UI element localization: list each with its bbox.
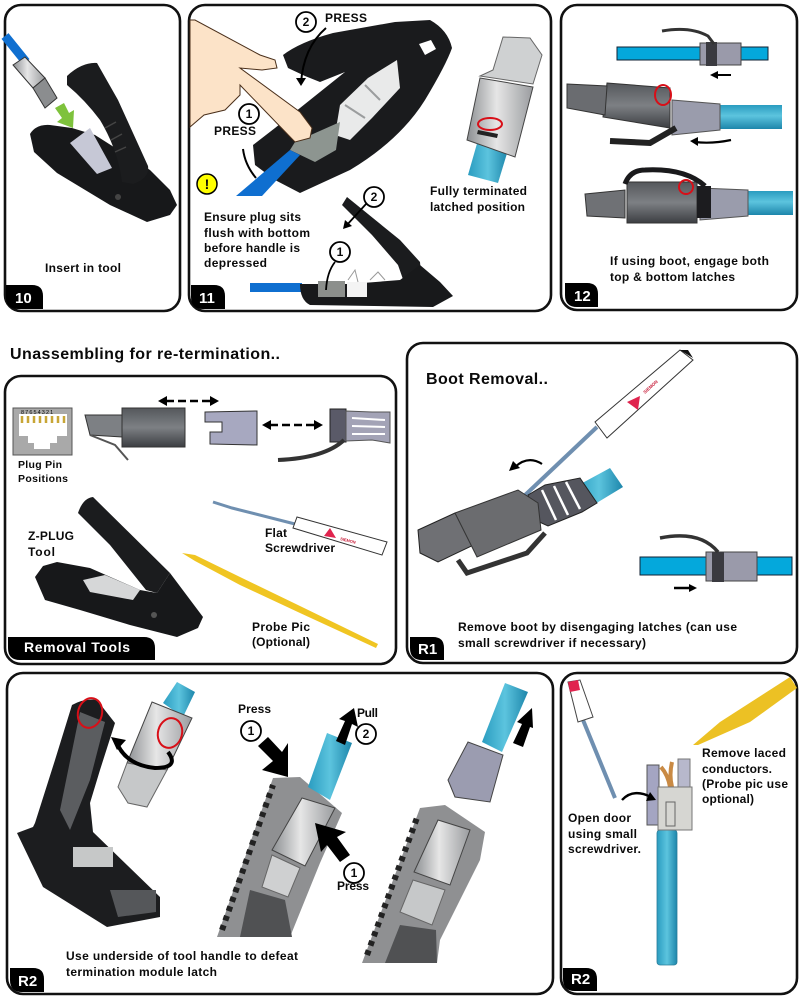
caption: If using boot, engage both (610, 254, 769, 268)
step label 12: 12 (574, 288, 591, 305)
caption: Use underside of tool handle to defeat (66, 949, 298, 963)
press and pull markers: 2 (363, 727, 370, 741)
caption: remove conductors: conductors. (702, 762, 772, 776)
note: before handle is (204, 241, 300, 255)
press 2 marker: 2 (303, 15, 310, 29)
caption: Insert in tool (45, 261, 121, 275)
step label R1 (410, 637, 444, 660)
label: Flat (265, 526, 287, 540)
panel: R2 door and conductors (561, 673, 797, 994)
icon: hand (190, 20, 312, 142)
icon: warning: ! (205, 176, 209, 192)
panel: step 10 (5, 5, 180, 311)
caption (458, 620, 737, 650)
caption: open door: screwdriver. (568, 842, 641, 856)
icon: curved arrow (509, 460, 542, 471)
press and pull markers: 1 (351, 866, 358, 880)
label (28, 529, 74, 559)
icon: curved arrow (622, 792, 656, 801)
icon: small screwdriver (568, 680, 615, 798)
press and pull markers: 1 (248, 724, 255, 738)
press and pull markers (238, 702, 378, 893)
press 2 marker: PRESS (325, 11, 367, 25)
icon: screwdriver in latch (522, 350, 693, 498)
step label 11: 11 (199, 290, 215, 307)
press and pull markers: Press (238, 702, 271, 716)
icon: plug pin diagram (13, 408, 72, 455)
step label R2: R2 (571, 971, 590, 988)
press 1 marker: 1 (246, 107, 253, 121)
caption: open door: using small (568, 827, 637, 841)
note: flush with bottom (204, 226, 310, 240)
caption: small screwdriver if necessary) (458, 636, 646, 650)
side markers: 2 (371, 190, 378, 204)
step label 12 (565, 283, 598, 307)
label: Probe Pic (252, 620, 310, 634)
label: Tool (28, 545, 55, 559)
caption: termination module latch (66, 965, 217, 979)
label: Z-PLUG (28, 529, 74, 543)
icon: red latch rings (75, 695, 185, 751)
label: (Optional) (252, 635, 310, 649)
press 1 marker (214, 104, 259, 178)
caption: top & bottom latches (610, 270, 735, 284)
caption: remove conductors (702, 746, 788, 806)
icon: Z-PLUG tool (35, 497, 203, 637)
note: Ensure plug sits (204, 210, 301, 224)
caption: open door: Open door (568, 811, 631, 825)
icon: boot on cable (640, 536, 792, 592)
tab label: Removal Tools (24, 639, 130, 655)
icon: plug housing (85, 408, 185, 460)
step label R2 (563, 968, 597, 991)
icon: open module on cable (647, 759, 692, 965)
arrow (262, 420, 323, 430)
icon: plug engaging bottom latch (567, 83, 782, 146)
icon: plug with latch (118, 682, 195, 807)
icon: plug pin diagram: 87654321 (21, 410, 54, 416)
icon: probe tip (693, 677, 797, 745)
label: Plug Pin (18, 459, 62, 471)
step label R1: R1 (418, 641, 437, 658)
label (265, 526, 335, 555)
label: Positions (18, 473, 68, 485)
label (252, 620, 310, 649)
caption: Fully terminated (430, 184, 527, 198)
caption: Remove boot by disengaging latches (can use (458, 620, 737, 634)
caption: open door (568, 811, 641, 856)
caption (430, 184, 527, 214)
panel: R2 tool latch (7, 673, 553, 994)
icon: plug with top latch engaged (585, 170, 793, 223)
icon: terminated plug (467, 37, 542, 183)
tab label (8, 637, 155, 660)
icon: plug seated in handle (217, 733, 352, 937)
icon: blue cable and plug (5, 36, 57, 108)
icon: probe pic (182, 553, 378, 648)
icon: Z-PLUG tool (30, 63, 177, 222)
press and pull markers: Press (337, 879, 369, 893)
step label R2 (10, 968, 44, 992)
icon: boot (278, 409, 390, 460)
icon: tool side view (250, 197, 453, 307)
arrow (158, 396, 219, 406)
icon: screwdriver in latch: SIEMON (642, 379, 659, 395)
side markers: 1 (337, 245, 344, 259)
step label 10: 10 (15, 290, 32, 307)
press 2 marker (296, 11, 367, 86)
icon: warning (197, 174, 217, 194)
press 1 marker: PRESS (214, 124, 256, 138)
icon: tool pressed by finger (236, 20, 452, 196)
panel: step 12 (561, 5, 797, 310)
note: depressed (204, 256, 267, 270)
caption: remove conductors: (Probe pic use (702, 777, 788, 791)
heading: Unassembling for re-termination.. (10, 346, 280, 363)
press and pull markers: Pull (357, 706, 378, 720)
icon: plug with boot (418, 468, 623, 573)
icon: termination module (205, 411, 257, 445)
heading: Boot Removal.. (426, 371, 548, 388)
icon: green insert arrow (55, 103, 74, 128)
label: Screwdriver (265, 541, 335, 555)
note (204, 210, 310, 270)
panel: step 11 (189, 5, 551, 311)
caption (66, 949, 298, 979)
step label 11 (191, 285, 225, 309)
panel: R1 boot removal (407, 343, 797, 663)
step label R2: R2 (18, 973, 37, 990)
label (18, 459, 68, 485)
side markers (326, 187, 384, 290)
icon: module removed from handle (362, 683, 533, 963)
caption (610, 254, 769, 284)
caption: remove conductors: optional) (702, 792, 754, 806)
icon: flat screwdriver: SIEMON (340, 536, 356, 545)
icon: open tool (17, 700, 160, 927)
step label 10 (6, 285, 43, 309)
caption: latched position (430, 200, 525, 214)
panel: removal tools (5, 376, 396, 664)
icon: flat screwdriver (213, 502, 387, 555)
caption: remove conductors: Remove laced (702, 746, 786, 760)
icon: boot sliding on cable (617, 29, 768, 79)
icon: curved arrow (111, 737, 172, 768)
